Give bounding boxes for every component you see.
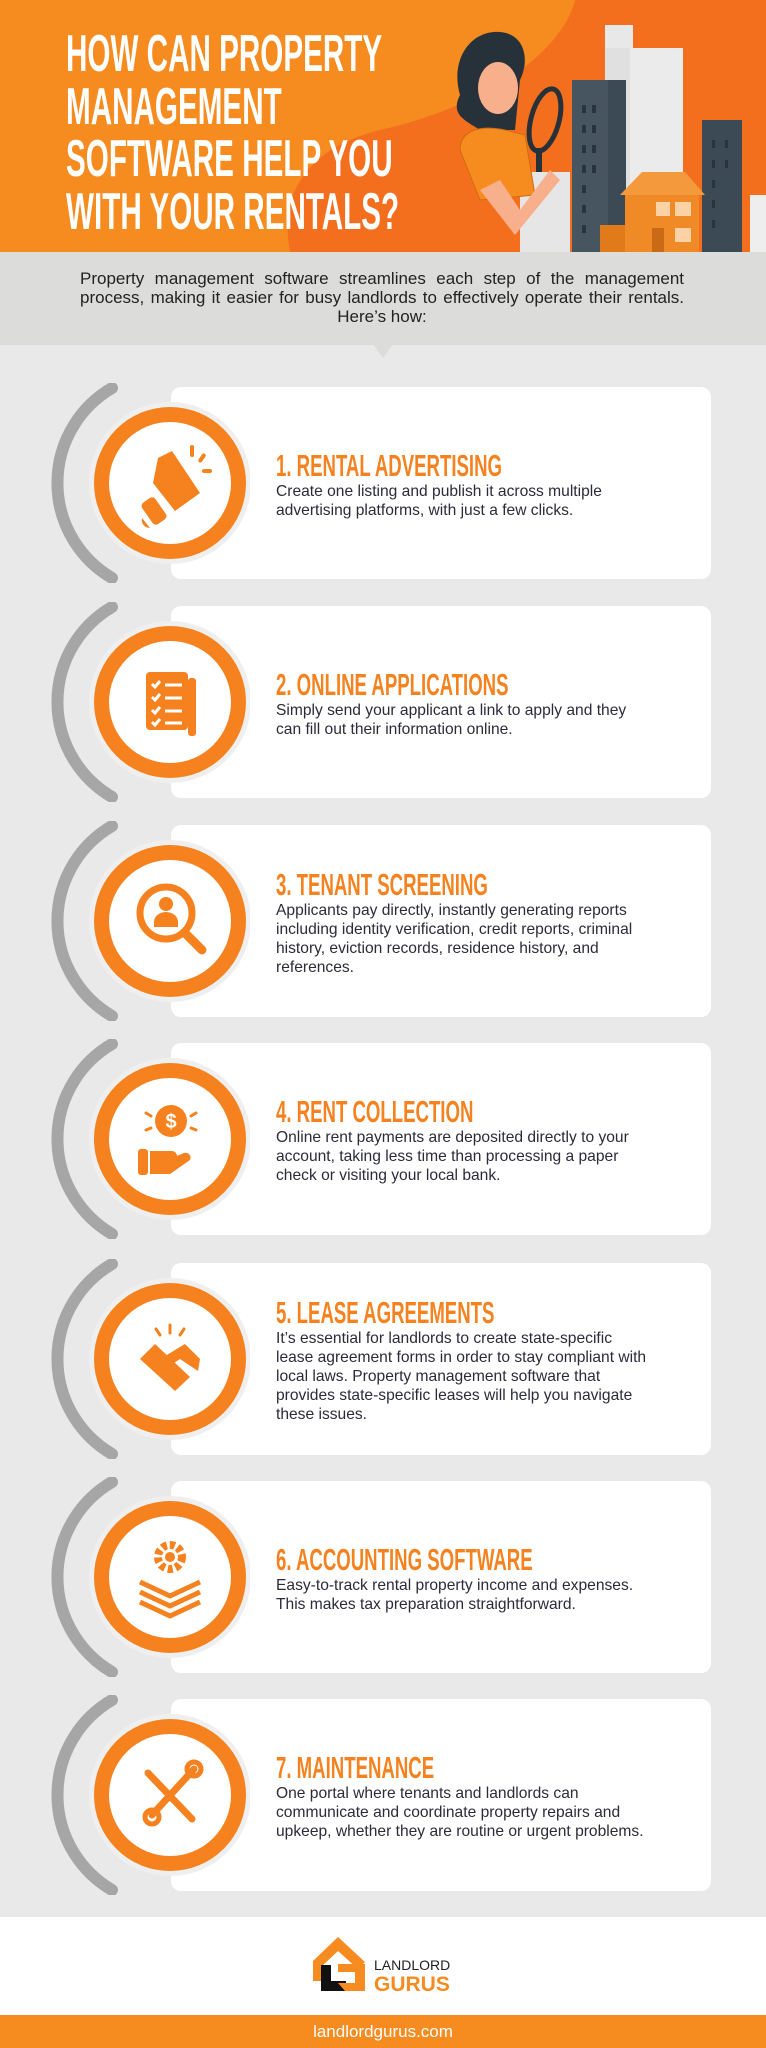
icon badge: magnifier person	[52, 821, 250, 1021]
title: WITH YOUR RENTALS?	[66, 182, 399, 240]
footer logo: LANDLORD	[374, 1957, 450, 1973]
illustration: woman with magnifier and buildings	[456, 25, 766, 252]
item 4: 4. RENT COLLECTION	[276, 1094, 473, 1129]
item 2	[52, 602, 711, 802]
item 2: Simply send your applicant a link to apply and they can fill out their information online.	[276, 702, 626, 738]
footer logo: GURUS	[374, 1973, 450, 1996]
item 6: 6. ACCOUNTING SOFTWARE	[276, 1542, 533, 1576]
item 3: 3. TENANT SCREENING	[276, 866, 488, 902]
footer url bar: landlordgurus.com	[313, 2022, 453, 2041]
item 4	[52, 1039, 711, 1239]
item 7	[52, 1695, 711, 1895]
item 2: 2. ONLINE APPLICATIONS	[276, 666, 509, 702]
title: SOFTWARE HELP YOU	[66, 130, 393, 188]
icon badge: money hand: $	[165, 1111, 177, 1133]
icon badge: checklist	[52, 602, 250, 802]
item 7: 7. MAINTENANCE	[276, 1750, 434, 1785]
item 5: It’s essential for landlords to create state-specific lease agreement forms in order to stay compliant with local laws. Property management software that provides state-specific leases will help you navigate these issues.	[276, 1330, 646, 1423]
icon badge: gear layers	[52, 1477, 250, 1677]
item 1: Create one listing and publish it across multiple advertising platforms, with just a few clicks.	[276, 482, 602, 518]
item 3: Applicants pay directly, instantly generating reports including identity verification, credit reports, criminal history, eviction records, residence history, and references.	[276, 902, 632, 976]
icon badge: tools	[52, 1695, 250, 1895]
item 1: 1. RENTAL ADVERTISING	[276, 448, 502, 482]
item 5: 5. LEASE AGREEMENTS	[276, 1295, 494, 1330]
intro text	[0, 252, 766, 345]
intro text: Property management software streamlines each step of the management process, making it easier for busy landlords to effectively operate their rentals. Here’s how:	[80, 269, 684, 326]
pointer arrow	[373, 344, 393, 358]
title: MANAGEMENT	[66, 78, 282, 136]
item 4: Online rent payments are deposited directly to your account, taking less time than processing a paper check or visiting your local bank.	[276, 1129, 629, 1184]
item 1	[52, 383, 711, 583]
item 3	[52, 821, 711, 1021]
title: HOW CAN PROPERTY	[66, 25, 382, 83]
icon badge: handshake	[52, 1259, 250, 1459]
icon badge: megaphone	[52, 383, 250, 583]
footer logo	[0, 1917, 766, 2015]
header banner	[0, 0, 766, 252]
title	[66, 25, 399, 240]
item 7: One portal where tenants and landlords can communicate and coordinate property repairs and upkeep, whether they are routine or urgent problems.	[276, 1785, 644, 1840]
item 6: Easy-to-track rental property income and expenses. This makes tax preparation straightforward.	[276, 1576, 633, 1612]
item 5	[52, 1259, 711, 1459]
item 6	[52, 1477, 711, 1677]
footer url bar	[0, 2015, 766, 2048]
icon badge: money hand	[52, 1039, 250, 1239]
